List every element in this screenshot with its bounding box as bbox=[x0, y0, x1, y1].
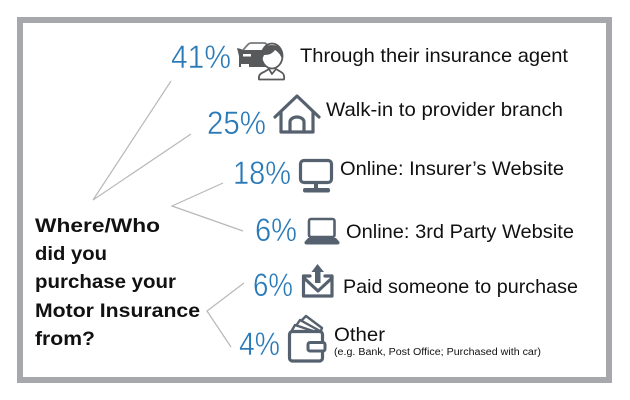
row: insurer website: 18% bbox=[233, 155, 291, 191]
question heading bbox=[35, 215, 200, 350]
row: insurance agent bbox=[171, 39, 569, 80]
icon: laptop bbox=[304, 219, 340, 244]
row: paid someone: 6% bbox=[253, 267, 293, 303]
icon: house bbox=[275, 96, 319, 132]
row: paid someone bbox=[253, 264, 578, 303]
icon: envelope with up arrow bbox=[304, 264, 332, 296]
row: other: 4% bbox=[239, 326, 280, 362]
row: third party website: 6% bbox=[255, 212, 297, 248]
row: provider branch bbox=[207, 96, 563, 141]
row: other bbox=[239, 316, 541, 362]
icon: car and agent bbox=[237, 43, 284, 80]
row: other: (e.g. Bank, Post Office; Purchased with car) bbox=[334, 347, 541, 358]
row: provider branch: Walk-in to provider branch bbox=[326, 99, 563, 121]
question heading: purchase your bbox=[35, 271, 176, 293]
row: provider branch: 25% bbox=[207, 105, 266, 141]
row: other: Other bbox=[334, 324, 386, 346]
row: insurance agent: 41% bbox=[171, 39, 231, 75]
connector lines: online bbox=[172, 183, 243, 231]
connector lines: paid and other bbox=[207, 283, 244, 347]
icon: wallet bbox=[290, 316, 325, 361]
question heading: from? bbox=[35, 328, 95, 350]
row: third party website bbox=[255, 212, 574, 248]
row: third party website: Online: 3rd Party Website bbox=[346, 221, 574, 243]
question heading: Motor Insurance bbox=[35, 300, 200, 322]
row: insurer website bbox=[233, 155, 564, 192]
row: insurer website: Online: Insurer’s Website bbox=[340, 158, 564, 180]
connector lines: agent and branch bbox=[93, 81, 191, 200]
row: paid someone: Paid someone to purchase bbox=[343, 276, 578, 298]
icon: desktop monitor bbox=[300, 160, 332, 192]
row: insurance agent: Through their insurance agent bbox=[300, 45, 569, 67]
question heading: did you bbox=[35, 243, 107, 265]
question heading: Where/Who bbox=[35, 215, 160, 237]
